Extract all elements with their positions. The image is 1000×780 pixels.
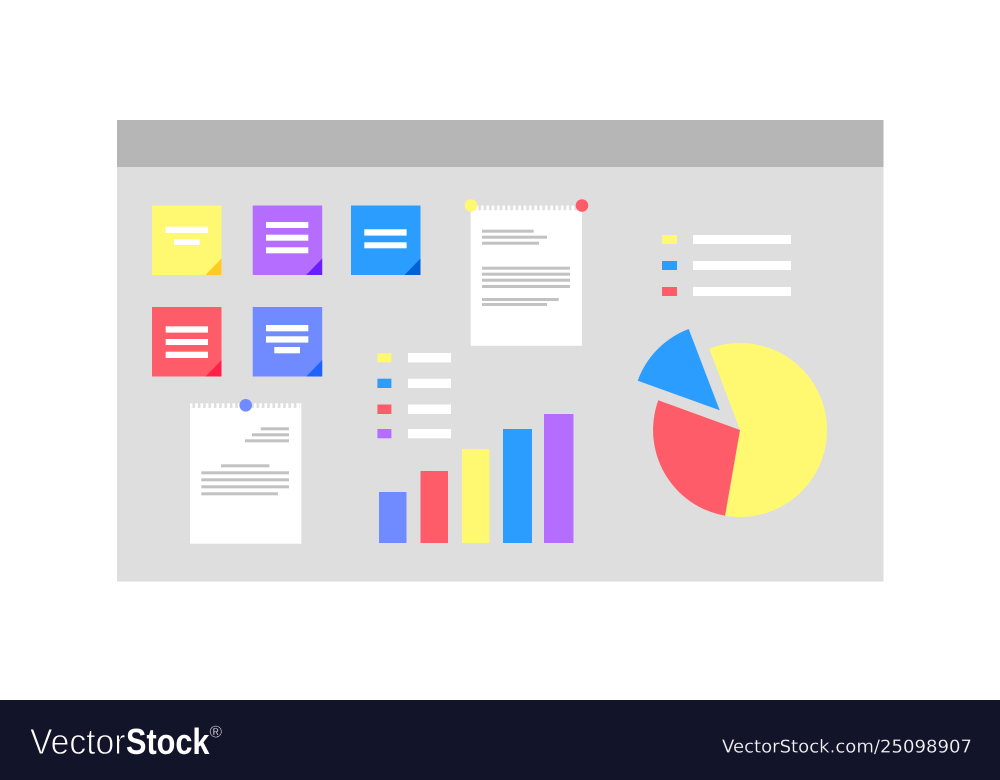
- legend: pie chart: [662, 235, 791, 296]
- sticky note: periwinkle: [253, 307, 322, 376]
- footer logo: ®: [210, 722, 222, 742]
- sticky note: purple: [253, 206, 322, 275]
- bar chart: [379, 414, 574, 543]
- sticky note: red: [152, 307, 222, 376]
- footer logo: [30, 721, 222, 762]
- footer bar: [0, 700, 1000, 780]
- board header bar: [117, 120, 884, 167]
- footer logo: Stock: [126, 721, 210, 762]
- document: bottom pinned page: [190, 399, 301, 544]
- panel: board: [117, 120, 884, 582]
- footer image id: VectorStock.com/25098907: [722, 736, 972, 758]
- document: top pinned page: [465, 199, 588, 346]
- sticky note: blue: [351, 206, 420, 275]
- legend: bar chart: [377, 353, 451, 438]
- pie chart: [638, 329, 827, 517]
- footer logo: Vector: [30, 721, 126, 762]
- sticky note: yellow: [152, 206, 222, 275]
